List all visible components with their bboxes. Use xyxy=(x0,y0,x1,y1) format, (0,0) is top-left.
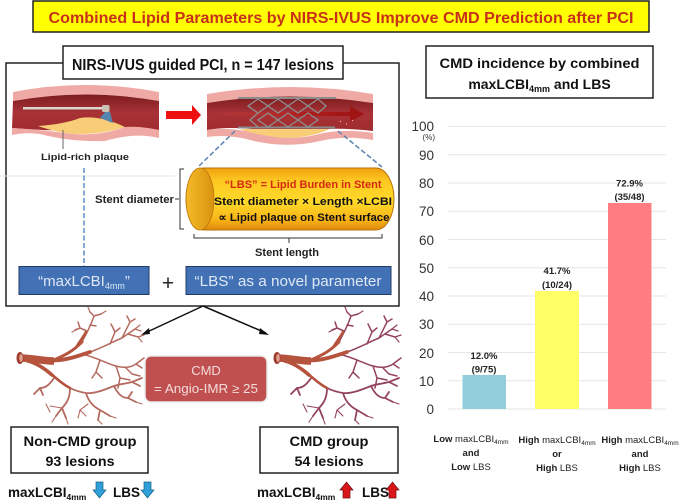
y axis labels: 70 xyxy=(419,204,434,219)
bar: high and high: (35/48) xyxy=(614,192,645,203)
category label: high and high: High LBS xyxy=(619,463,661,474)
LBS cylinder: Stent diameter × Length ×LCBI xyxy=(214,196,392,208)
box: LBS novel parameter: “LBS” as a novel parameter xyxy=(194,273,382,290)
category label: high and high xyxy=(601,435,679,474)
callout: CMD definition xyxy=(145,356,267,402)
box: maxLCBI4mm: ” xyxy=(125,273,130,290)
y axis labels: 10 xyxy=(419,374,434,389)
guide line to maxLCBI xyxy=(83,168,85,266)
category label: low and low: 4mm xyxy=(494,439,509,446)
bar: high or high: (10/24) xyxy=(542,280,572,291)
non-CMD parameters: LBS xyxy=(113,485,140,500)
y axis labels: 40 xyxy=(419,289,434,304)
y axis labels: 100 xyxy=(411,119,434,134)
box: LBS novel parameter xyxy=(186,266,391,294)
category label: high and high: 4mm xyxy=(664,440,679,447)
CMD parameters xyxy=(257,482,399,500)
y axis labels xyxy=(411,119,435,417)
LBS cylinder xyxy=(186,168,394,230)
stent diameter label xyxy=(95,169,184,229)
panel heading: NIRS-IVUS guided PCI, n = 147 lesions xyxy=(72,57,334,74)
box: non-CMD group: Non-CMD group xyxy=(24,433,136,449)
bar: low and low: 12.0% xyxy=(471,351,498,362)
bar: high or high xyxy=(535,266,579,409)
plus sign: + xyxy=(162,272,174,295)
stent diameter label: Stent diameter xyxy=(95,194,175,206)
y axis labels: 50 xyxy=(419,261,434,276)
bar chart xyxy=(411,119,679,474)
box: non-CMD group: 93 lesions xyxy=(46,453,115,469)
LBS cylinder: “LBS” = Lipid Burden in Stent xyxy=(224,179,382,191)
box: maxLCBI4mm: “maxLCBI xyxy=(38,273,105,290)
category label: low and low: Low LBS xyxy=(451,462,491,473)
y axis labels: 90 xyxy=(419,148,434,163)
panel: NIRS-IVUS guided PCI xyxy=(0,46,399,306)
callout: CMD definition: = Angio-IMR ≥ 25 xyxy=(154,381,258,396)
chart heading: 4mm xyxy=(529,84,550,94)
arrow: stent step xyxy=(166,105,201,125)
y axis labels: 30 xyxy=(419,317,434,332)
category label: high and high: High maxLCBI xyxy=(601,435,664,446)
box: maxLCBI4mm: 4mm xyxy=(105,281,125,291)
box: non-CMD group xyxy=(11,427,148,473)
y axis labels: (%) xyxy=(423,133,435,142)
vessel with stent xyxy=(207,87,373,145)
non-CMD parameters: maxLCBI xyxy=(8,485,67,500)
category label: high or high xyxy=(518,435,596,474)
bar: low and low xyxy=(462,351,506,409)
callout: CMD definition: CMD xyxy=(191,363,221,378)
category label: low and low: and xyxy=(463,448,480,459)
y axis labels: 60 xyxy=(419,233,434,248)
CMD parameters: LBS xyxy=(362,485,389,500)
panel heading xyxy=(63,46,343,79)
CMD parameters: maxLCBI xyxy=(257,485,316,500)
bar: low and low: (9/75) xyxy=(472,364,496,376)
y axis labels: 0 xyxy=(426,402,434,417)
category label: low and low: Low maxLCBI xyxy=(433,434,494,445)
bar: high and high: 72.9% xyxy=(616,178,644,190)
chart heading xyxy=(426,46,653,98)
y axis labels: 20 xyxy=(419,346,434,361)
chart heading: maxLCBI xyxy=(468,76,529,92)
category label: high or high: High LBS xyxy=(536,463,578,474)
box: CMD group xyxy=(260,427,398,473)
y axis labels: 80 xyxy=(419,176,434,191)
title banner xyxy=(33,1,649,32)
branching arrows xyxy=(141,306,269,335)
title banner: Combined Lipid Parameters by NIRS-IVUS Improve CMD Prediction after PCI xyxy=(48,10,634,27)
non-CMD parameters xyxy=(8,482,154,500)
category label: high or high: High maxLCBI xyxy=(518,435,581,446)
stent length label: Stent length xyxy=(255,247,319,259)
bar: high or high: 41.7% xyxy=(544,266,571,277)
LBS cylinder: ∝ Lipid plaque on Stent surface xyxy=(218,212,390,224)
box: CMD group: CMD group xyxy=(290,433,368,449)
icon: CMD vessel tree xyxy=(274,307,401,424)
zoom guide lines xyxy=(198,131,382,167)
bar: high and high xyxy=(608,178,652,409)
icon: non-CMD vessel tree xyxy=(16,307,144,424)
category label: high or high: or xyxy=(552,449,562,460)
box: CMD group: 54 lesions xyxy=(294,453,364,469)
box: maxLCBI4mm xyxy=(19,266,149,294)
category label: low and low xyxy=(433,434,509,473)
stent length label xyxy=(194,234,382,259)
chart heading: and LBS xyxy=(550,76,611,92)
label: lipid-rich plaque: Lipid-rich plaque xyxy=(41,152,129,162)
chart heading: CMD incidence by combined xyxy=(440,55,640,71)
category label: high or high: 4mm xyxy=(581,440,596,447)
vessel with lipid-rich plaque xyxy=(12,85,159,149)
category label: high and high: and xyxy=(632,449,649,460)
